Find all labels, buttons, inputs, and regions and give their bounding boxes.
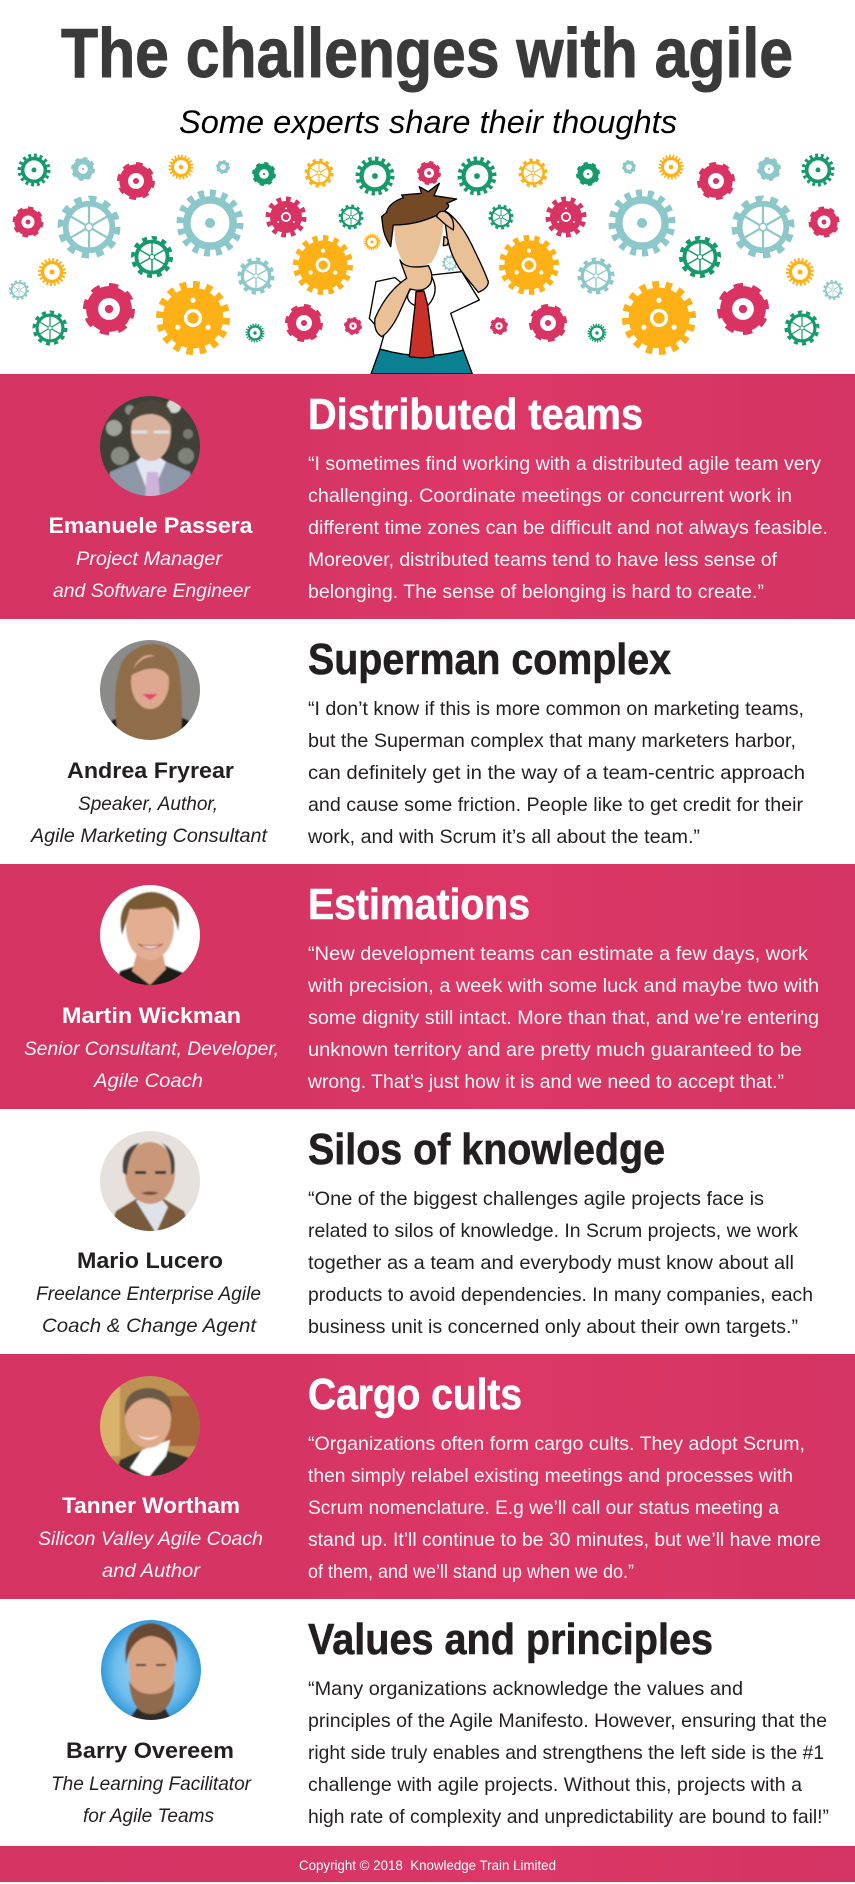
heading: Silos of knowledge [308,1125,665,1174]
panel: silos of knowledge [36,1125,813,1338]
gears: left cluster [10,155,392,351]
expert name and role: Freelance Enterprise Agile [36,1284,261,1305]
panel: estimations [0,864,855,1109]
quote: Moreover, distributed teams tend to have less sense of [308,549,778,571]
expert name and role: Project Manager [76,549,223,570]
quote [308,1188,813,1338]
quote: “I sometimes find working with a distributed agile team very [308,453,821,475]
heading: Values and principles [308,1615,713,1664]
quote: “One of the biggest challenges agile projects face is [308,1188,764,1210]
illustration: puzzled man scratching head [369,183,488,374]
panel: distributed teams [0,374,855,619]
band background [0,864,855,1109]
photo: Mario Lucero [98,1129,202,1233]
quote: but the Superman complex that many marketers harbor, [308,730,796,752]
band background [0,374,855,619]
expert name and role: Agile Coach [93,1071,203,1092]
quote [307,943,819,1093]
expert name and role [51,1738,252,1827]
photo: Barry Overeem [99,1618,203,1722]
quote: stand up. It’ll continue to be 30 minutes, but we’ll have more [308,1529,821,1551]
expert name and role [38,1493,263,1582]
quote: “Organizations often form cargo cults. They adopt Scrum, [308,1433,805,1455]
quote: of them, and we’ll stand up when we do.” [308,1561,634,1583]
photo: Martin Wickman [98,883,202,987]
expert name and role: for Agile Teams [83,1806,214,1827]
quote: high rate of complexity and unpredictability are bound to fail!” [308,1806,829,1828]
expert name and role: Andrea Fryrear [67,758,234,783]
expert name and role: and Author [102,1561,201,1582]
band background [0,1354,855,1599]
heading: Superman complex [308,635,671,684]
expert name and role: Agile Marketing Consultant [30,826,268,847]
photo: Tanner Wortham [98,1374,202,1478]
quote: different time zones can be difficult and not always feasible. [308,517,828,539]
quote: belonging. The sense of belonging is hard to create.” [308,581,764,603]
expert name and role: Silicon Valley Agile Coach [38,1529,263,1550]
gear: small teal by figure [443,256,457,270]
quote: “I don’t know if this is more common on marketing teams, [308,698,804,720]
expert name and role: Tanner Wortham [62,1493,240,1518]
quote [307,698,805,848]
heading: Distributed teams [308,390,643,439]
quote: “Many organizations acknowledge the values and [308,1678,743,1700]
quote: business unit is concerned only about their own targets.” [308,1316,798,1338]
expert name and role: Coach & Change Agent [42,1316,257,1337]
quote: unknown territory and are pretty much guaranteed to be [308,1039,802,1061]
expert name and role [48,513,253,602]
quote: can definitely get in the way of a team-centric approach [308,762,805,784]
quote: Scrum nomenclature. E.g we’ll call our status meeting a [308,1497,779,1519]
quote: right side truly enables and strengthens the left side is the #1 [308,1742,824,1764]
quote: wrong. That’s just how it is and we need to accept that.” [307,1071,784,1093]
quote [308,1678,829,1828]
quote: together as a team and everybody must know about all [308,1252,794,1274]
quote: and cause some friction. People like to get credit for their [308,794,803,816]
expert name and role: Barry Overeem [66,1738,234,1763]
quote: products to avoid dependencies. In many companies, each [308,1284,813,1306]
footer bar [0,1846,855,1882]
expert name and role: Senior Consultant, Developer, [24,1039,279,1060]
panel: superman complex [30,635,805,848]
expert name and role: The Learning Facilitator [51,1774,252,1795]
heading: Cargo cults [308,1370,522,1419]
quote: principles of the Agile Manifesto. However, ensuring that the [308,1710,827,1732]
expert name and role: Mario Lucero [77,1248,223,1273]
quote [308,453,828,603]
quote: challenge with agile projects. Without this, projects with a [308,1774,802,1796]
quote: work, and with Scrum it’s all about the team.” [307,826,700,848]
quote: then simply relabel existing meetings and processes with [308,1465,793,1487]
quote: some dignity still intact. More than that, and we’re entering [308,1007,819,1029]
expert name and role: Emanuele Passera [48,513,253,538]
panel: values and principles [51,1615,829,1828]
quote: with precision, a week with some luck and maybe two with [307,975,819,997]
quote: challenging. Coordinate meetings or concurrent work in [308,485,792,507]
quote: related to silos of knowledge. In Scrum projects, we work [308,1220,798,1242]
gear: top centre red [418,162,440,184]
gear: small yellow by figure [364,234,380,250]
photo: Emanuele Passera [98,394,202,498]
heading: Estimations [308,880,530,929]
quote: “New development teams can estimate a few days, work [308,943,808,965]
subtitle: Some experts share their thoughts [179,104,677,140]
expert name and role: and Software Engineer [53,581,251,602]
gears: right cluster [460,155,842,351]
quote [308,1433,821,1583]
expert name and role [36,1248,261,1337]
panel: cargo cults [0,1354,855,1599]
footer bar: Copyright © 2018 Knowledge Train Limited [299,1857,556,1873]
expert name and role [24,1003,279,1092]
photo: Andrea Fryrear [98,638,202,742]
expert name and role [30,758,268,847]
expert name and role: Martin Wickman [62,1003,241,1028]
expert name and role: Speaker, Author, [78,794,218,815]
